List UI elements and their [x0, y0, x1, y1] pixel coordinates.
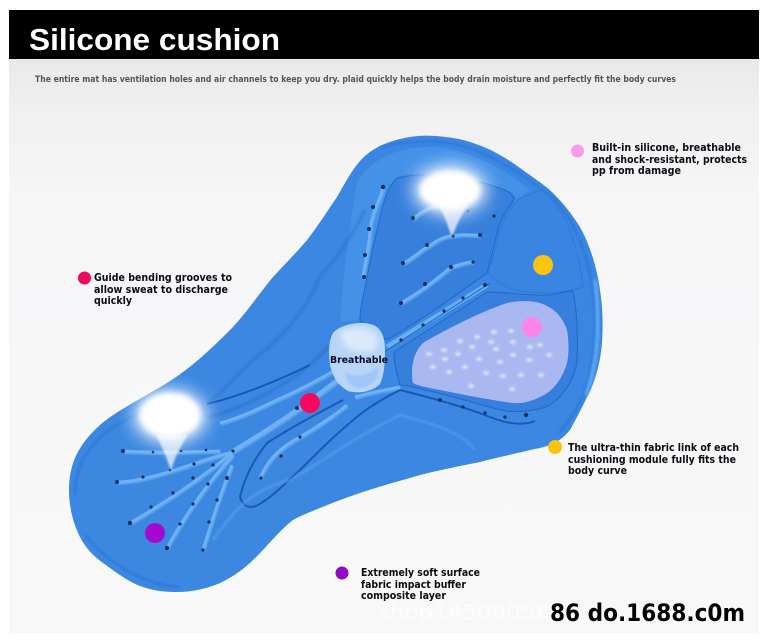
- callout text: pp from damage: [592, 165, 681, 177]
- mist puff: top: [414, 166, 486, 237]
- upper rim band: [340, 147, 530, 322]
- gel pad: [412, 301, 568, 403]
- callout: soft surface: [336, 566, 480, 602]
- silicone cushion illustration: [69, 136, 603, 592]
- callout: built-in silicone: [571, 142, 747, 177]
- subtitle: The entire mat has ventilation holes and air channels to keep you dry. plaid quickly helps the body drain moisture and perfectly fit the body curves: [35, 75, 676, 85]
- callout text: cushioning module fully fits the: [568, 454, 736, 466]
- marker: red on cushion: [300, 393, 320, 413]
- legend dot: purple: [336, 566, 348, 580]
- marker: purple on cushion: [145, 523, 165, 543]
- legend dot: pink: [571, 144, 584, 158]
- faint shop watermark: shop14509058: [378, 600, 550, 624]
- breathable label: Breathable: [330, 355, 388, 366]
- callout text: fabric impact buffer: [361, 579, 467, 591]
- callout: ultra-thin fabric: [548, 440, 739, 477]
- legend dot: yellow: [548, 440, 562, 454]
- callout text: quickly: [94, 295, 132, 307]
- title: Silicone cushion: [29, 22, 280, 57]
- deep seams: [207, 365, 535, 507]
- gel pad holes: [426, 329, 552, 391]
- site watermark: 86 do.1688.c0m: [550, 599, 745, 627]
- long diagonal groove: [387, 285, 487, 347]
- callout text: Built-in silicone, breathable: [592, 142, 741, 154]
- ventilation holes: [115, 185, 528, 552]
- callout text: and shock-resistant, protects: [592, 154, 747, 166]
- left crease: [208, 210, 365, 403]
- breathable gel blob: [329, 323, 385, 392]
- callout text: composite layer: [361, 590, 447, 602]
- channel grooves: [117, 187, 480, 550]
- outer rim: [75, 141, 595, 587]
- gel panel surround: [394, 291, 577, 412]
- callout text: Guide bending grooves to: [94, 272, 232, 284]
- callout text: Extremely soft surface: [361, 567, 480, 579]
- marker: yellow on cushion: [533, 255, 553, 275]
- right upper panel: [488, 190, 583, 293]
- callout text: body curve: [568, 465, 627, 477]
- title bar: [9, 10, 759, 59]
- cushion outline: [69, 136, 603, 592]
- callout text: The ultra-thin fabric link of each: [568, 442, 739, 454]
- bottom soft crease: [213, 415, 475, 540]
- legend dot: red: [78, 272, 91, 284]
- callout: guide grooves: [78, 272, 232, 307]
- callout text: allow sweat to discharge: [94, 284, 228, 296]
- upper panel: [360, 175, 514, 340]
- mist puff: bottom: [134, 390, 206, 471]
- marker: pink on cushion: [522, 317, 542, 337]
- groove shadows: [118, 188, 481, 552]
